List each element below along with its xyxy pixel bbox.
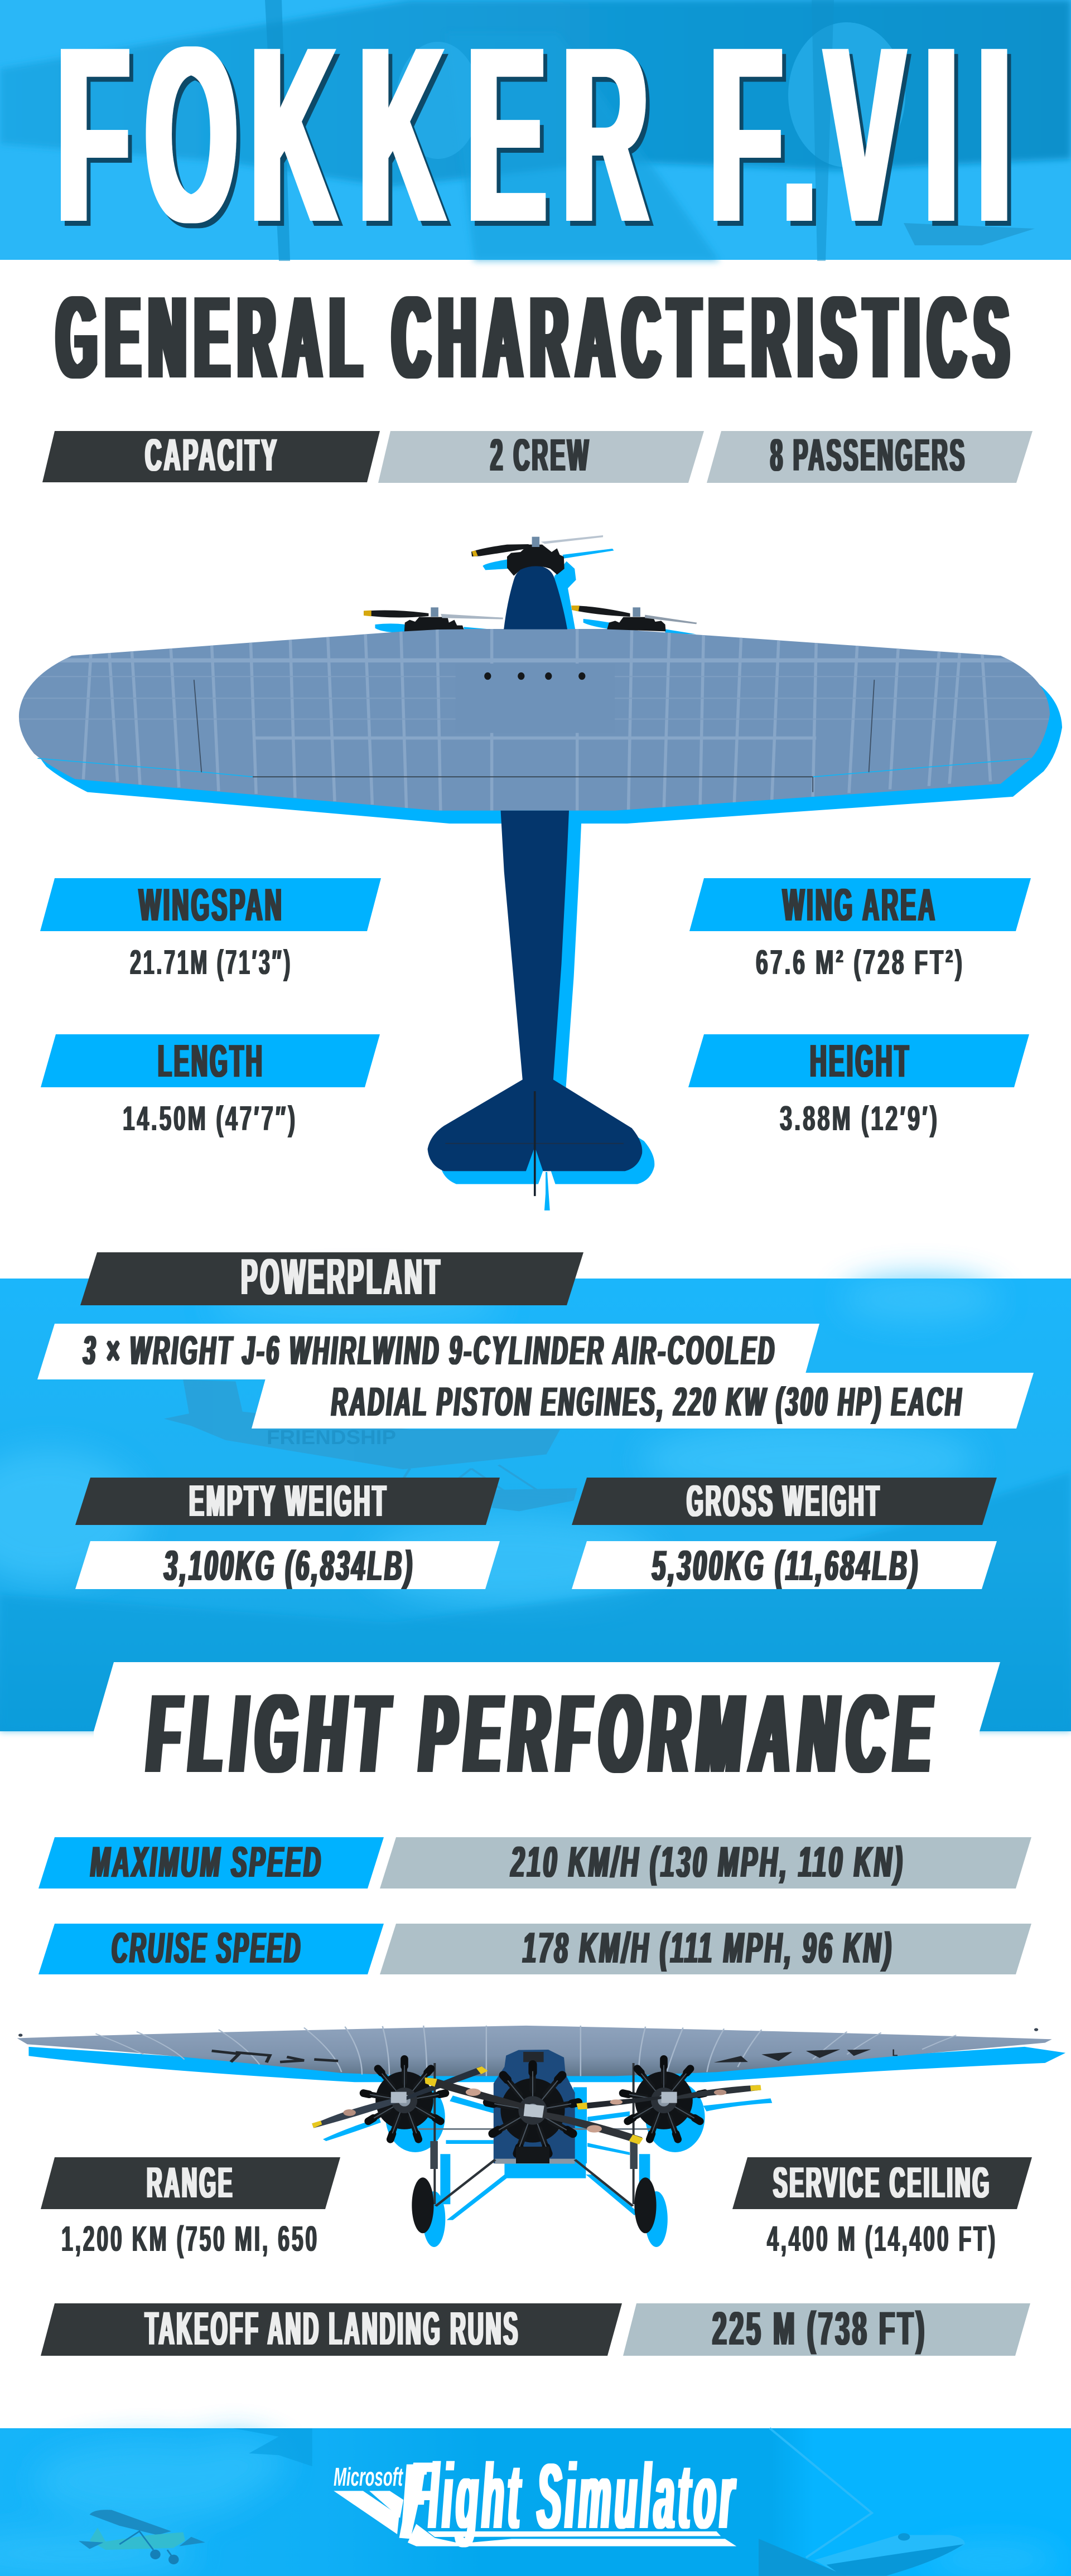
length label [41,1034,380,1087]
height label: HEIGHT [810,1035,911,1087]
powerplant section background [0,1277,1071,1731]
cruise speed row [38,1923,1031,1974]
maximum speed row [38,1837,1031,1889]
wing [13,629,1052,811]
empty weight: 3,100KG (6,834LB) [164,1542,414,1590]
propellers [312,2066,761,2144]
Microsoft Flight Simulator logo [334,2445,737,2548]
cruise speed row: CRUISE SPEED [112,1923,302,1972]
takeoff and landing runs row: TAKEOFF AND LANDING RUNS [145,2302,520,2355]
height label [688,1034,1029,1087]
height value: 3.88M (12′9′) [780,1100,939,1138]
length value: 14.50M (47′7″) [123,1100,297,1138]
empty weight [75,1476,500,1590]
top view aircraft [13,535,1062,1210]
powerplant heading [80,1249,583,1305]
Microsoft Flight Simulator logo: Microsoft [334,2462,403,2491]
gear and engine shadows [323,2081,772,2247]
engine and propeller shadows [375,549,696,634]
aircraft shadow [31,642,1062,1210]
powerplant heading: POWERPLANT [241,1249,442,1305]
wing area label [689,878,1031,931]
range label [41,2157,340,2209]
capacity row: 2 CREW [490,430,591,481]
wingspan label: WINGSPAN [139,879,284,931]
wingspan label [40,878,381,931]
nose and engines [364,535,697,631]
footer banner background [0,2428,1071,2576]
front view aircraft [17,2026,1065,2247]
gross weight [572,1476,997,1590]
fuselage and tail [428,811,642,1209]
radial engines [364,2059,445,2139]
length label: LENGTH [158,1035,264,1087]
capacity row [42,430,1033,483]
front wing [17,2026,1052,2076]
wingspan value: 21.71M (71′3″) [130,943,292,982]
powerplant description [37,1324,1034,1429]
title: FOKKER F.VII [57,0,1011,274]
range value: 1,200 KM (750 MI, 650 [61,2219,319,2259]
capacity row: CAPACITY [145,430,279,481]
range label: RANGE [147,2158,234,2207]
footer top plane silhouette [233,2428,312,2466]
fuselage and landing gear [412,2050,657,2233]
wing shadow [28,2047,1065,2082]
powerplant section background: FRIENDSHIP [267,1426,396,1449]
header banner background [0,0,1071,261]
footer right plane [759,2533,965,2576]
empty weight: EMPTY WEIGHT [189,1476,388,1526]
footer left plane [79,2510,205,2564]
maximum speed row: MAXIMUM SPEED [90,1837,323,1886]
